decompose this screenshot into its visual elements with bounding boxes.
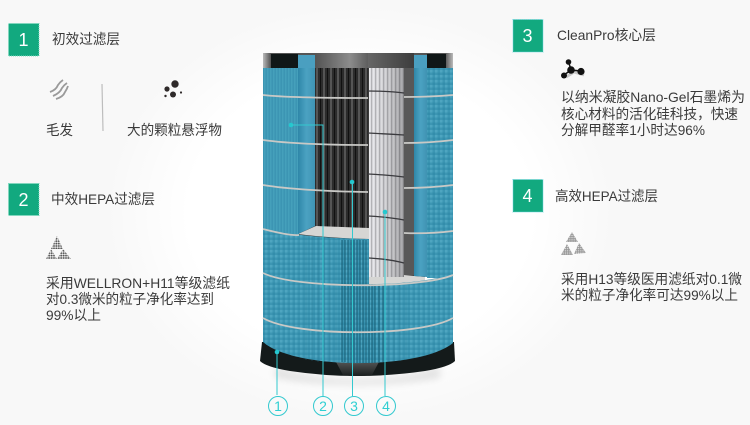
body text 2 (46, 275, 230, 323)
blue column, left (298, 55, 315, 234)
white pleat shading (369, 68, 404, 277)
icon: fine dust triangle (46, 236, 71, 259)
panel: layer 2 (8, 184, 230, 323)
callout numbers: 2 (319, 398, 327, 414)
label: hair: 毛发 (46, 122, 73, 138)
icon: hair (50, 80, 68, 99)
dark grey side band (404, 68, 414, 275)
panel: layer 3 (513, 20, 745, 138)
base ring (260, 342, 455, 376)
callout numbers (274, 398, 390, 414)
body text 2: 对0.3微米的粒子净化率达到 (46, 291, 214, 307)
filter cartridge illustration (260, 53, 455, 385)
icon: particles (164, 80, 182, 98)
callout numbers: 3 (350, 398, 358, 414)
body text 3: 分解甲醛率1小时达96% (561, 122, 705, 138)
badge 2 (8, 184, 39, 216)
body text 4: 采用H13等级医用滤纸对0.1微 (561, 271, 742, 287)
callout 4 (376, 210, 396, 416)
badge 2: 2 (18, 190, 29, 210)
heading 4: 高效HEPA过滤层 (555, 188, 658, 204)
badge 1 (8, 24, 39, 56)
outer blue mesh, left (263, 68, 299, 240)
badge 1: 1 (18, 30, 29, 50)
dark pleated layer (315, 68, 368, 228)
callout 1 (268, 350, 288, 416)
callout numbers: 4 (382, 398, 390, 414)
panel: layer 4 (513, 180, 742, 303)
body text 2: 99%以上 (46, 307, 101, 323)
base shadow (275, 366, 440, 385)
body text 4: 米的粒子净化率可达99%以上 (561, 287, 738, 303)
retaining hoops (263, 95, 453, 332)
white pleated HEPA layer (369, 68, 404, 277)
blue column, right (414, 55, 427, 277)
badge 4: 4 (522, 186, 533, 206)
body text 3 (561, 89, 745, 138)
inner dark core of the filter (298, 68, 425, 283)
body text 4 (561, 271, 742, 303)
heading 2: 中效HEPA过滤层 (51, 191, 155, 207)
callout lines (268, 123, 396, 415)
heading 1: 初效过滤层 (52, 31, 120, 47)
label: large particles: 大的颗粒悬浮物 (127, 122, 222, 138)
front blue mesh wall (263, 228, 453, 363)
top cap (263, 53, 453, 68)
icon: ultrafine dust triangle (561, 232, 586, 255)
inner floor (298, 226, 425, 284)
callout 3 (344, 180, 364, 416)
faint front pleats (306, 236, 406, 362)
callout 2 (289, 123, 332, 415)
outer blue mesh, right (427, 68, 453, 278)
pleat separators (368, 91, 404, 263)
badge 3 (513, 20, 543, 52)
base centre highlight (335, 360, 380, 376)
badge 4 (513, 180, 543, 212)
body text 2: 采用WELLRON+H11等级滤纸 (46, 275, 230, 291)
icon: molecule (561, 59, 585, 78)
body text 3: 核心材料的活化硅科技，快速 (561, 106, 738, 122)
panel: layer 1 (8, 24, 222, 138)
heading 3: CleanPro核心层 (557, 27, 656, 43)
badge 3: 3 (522, 26, 533, 46)
callout numbers: 1 (274, 398, 282, 414)
front pleat stripes (342, 240, 383, 363)
divider (102, 84, 103, 131)
body text 3: 以纳米凝胶Nano-Gel石墨烯为 (561, 89, 745, 105)
